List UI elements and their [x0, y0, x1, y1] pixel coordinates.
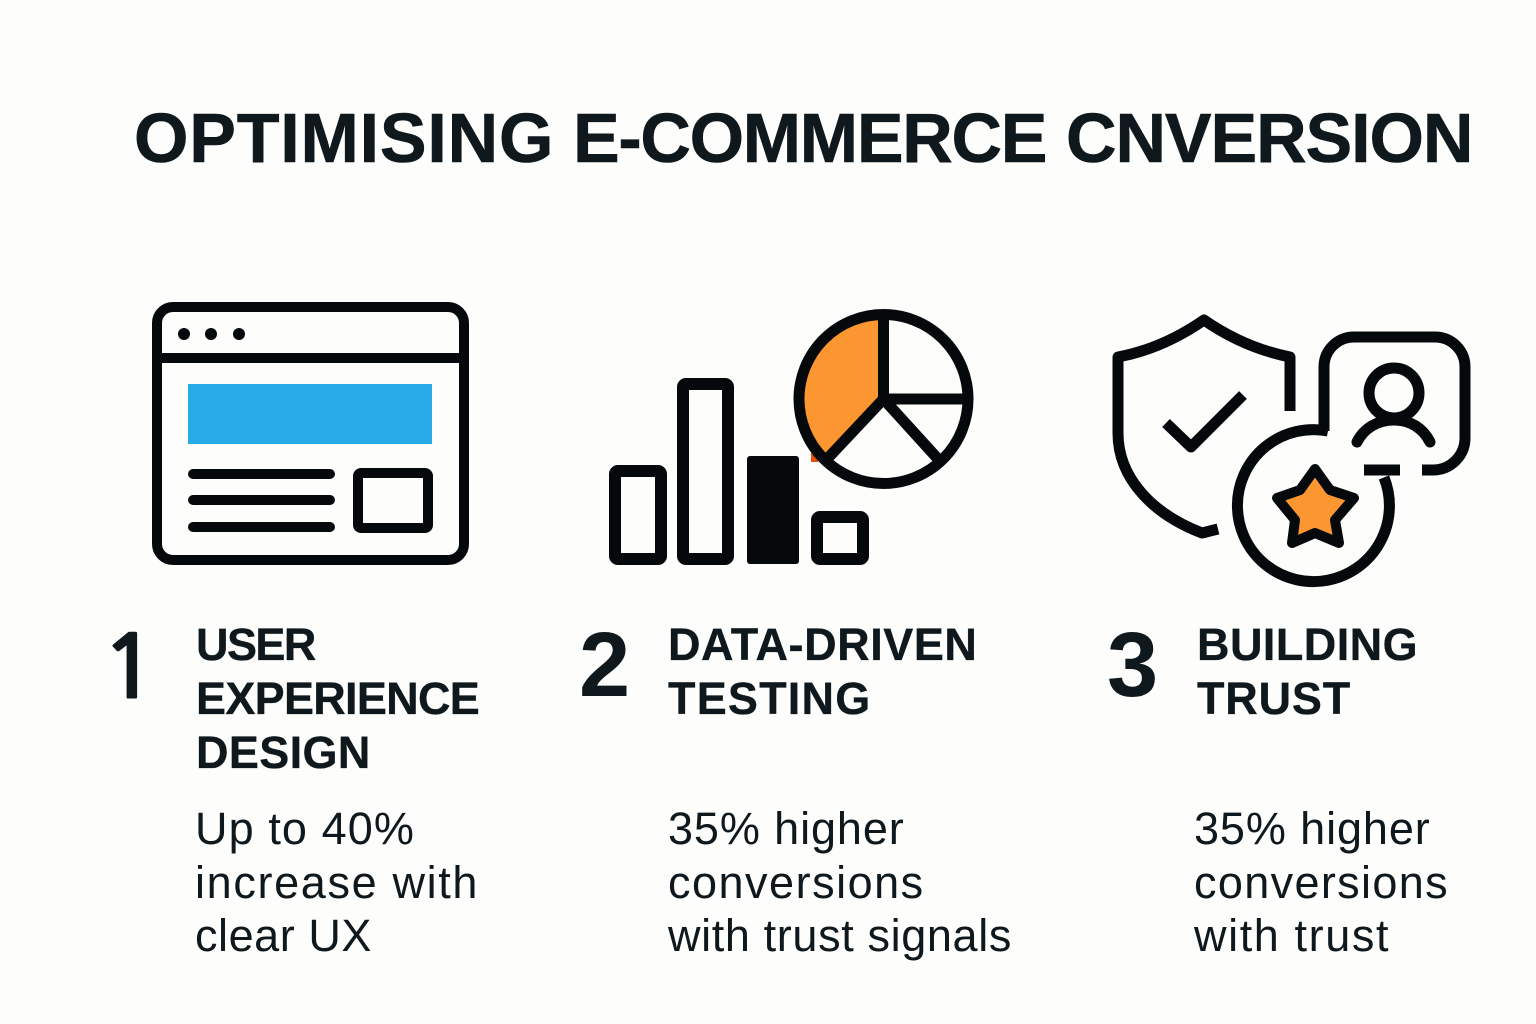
heading 1: USER — [196, 619, 315, 670]
heading 3: BUILDING — [1197, 619, 1418, 670]
title: E-COMMERCE — [573, 99, 1046, 177]
text 1: clear UX — [195, 910, 372, 961]
heading 3: TRUST — [1197, 673, 1351, 724]
text 3: conversions — [1194, 856, 1449, 908]
number 1: 1 — [100, 625, 160, 712]
heading 1: EXPERIENCE — [196, 673, 479, 724]
title: OPTIMISING — [134, 99, 554, 177]
text 2 — [668, 803, 1012, 961]
title — [134, 99, 1472, 177]
heading 1: DESIGN — [196, 727, 371, 778]
text 3 — [1194, 803, 1449, 961]
icon: bar chart and pie — [615, 314, 968, 564]
heading 2: TESTING — [668, 673, 871, 724]
number 2: 2 — [579, 614, 630, 716]
text 1: increase with — [195, 856, 479, 908]
text 2: conversions — [668, 856, 925, 908]
heading 3 — [1197, 619, 1418, 724]
heading 2: DATA-DRIVEN — [668, 619, 977, 670]
text 2: with trust signals — [668, 910, 1012, 961]
text 1: Up to 40% — [195, 803, 415, 854]
icon: browser window — [157, 307, 464, 560]
text 1 — [195, 803, 479, 961]
number 3: 3 — [1107, 614, 1158, 716]
title: CNVERSION — [1066, 99, 1472, 177]
icon: trust shield, user and star — [1118, 320, 1465, 582]
text 2: 35% higher — [668, 803, 905, 854]
text 3: 35% higher — [1194, 803, 1431, 854]
heading 2 — [668, 619, 977, 724]
heading 1 — [196, 619, 479, 778]
text 3: with trust — [1194, 910, 1390, 961]
